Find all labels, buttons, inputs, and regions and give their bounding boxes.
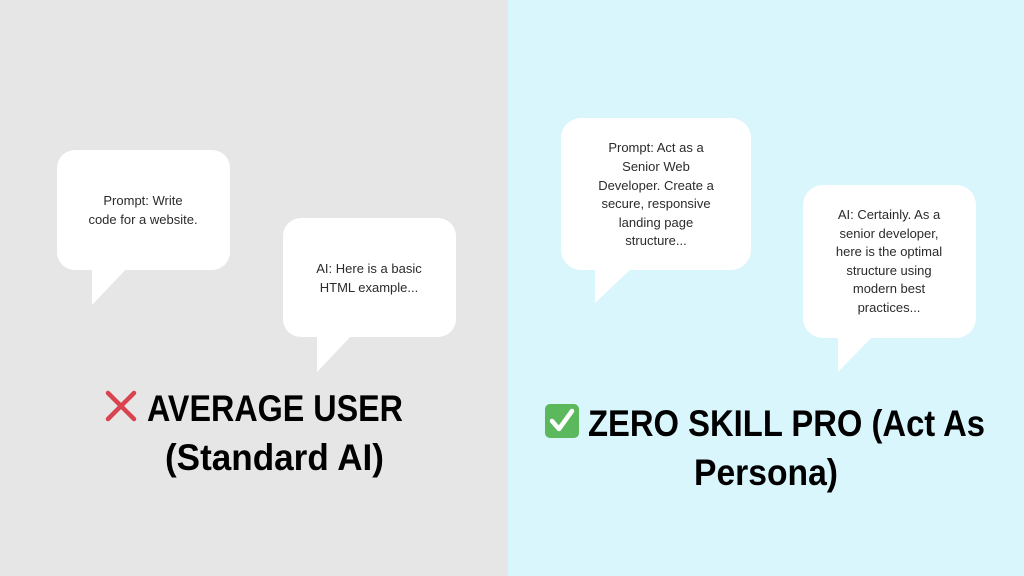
- bubble: expert AI reply: structure using: [846, 263, 932, 278]
- bubble: expert AI reply: [803, 185, 976, 372]
- bubble: basic AI reply: [283, 218, 456, 372]
- bubble: expert AI reply: senior developer,: [839, 226, 939, 241]
- bubble: basic AI reply: AI: Here is a basic: [316, 261, 422, 276]
- bubble: user prompt: Prompt: Write: [103, 193, 183, 208]
- bubble: user prompt: code for a website.: [88, 212, 198, 227]
- bubble: persona prompt: Prompt: Act as a: [608, 140, 704, 155]
- heading: average user: [147, 388, 403, 478]
- heading: zero skill pro: Persona): [694, 452, 838, 493]
- bubble: expert AI reply: AI: Certainly. As a: [838, 207, 941, 222]
- bubble: expert AI reply: practices...: [858, 300, 920, 315]
- bubble: expert AI reply: here is the optimal: [836, 244, 942, 259]
- bubble: persona prompt: [561, 118, 751, 303]
- icon: green check: [545, 404, 579, 438]
- panel: zero skill pro background: [508, 0, 1024, 576]
- bubble: persona prompt: Senior Web: [622, 159, 690, 174]
- bubble: user prompt: [57, 150, 230, 305]
- bubble: persona prompt: landing page: [619, 215, 693, 230]
- bubble: persona prompt: structure...: [625, 233, 687, 248]
- bubble: persona prompt: Developer. Create a: [598, 178, 715, 193]
- bubble: basic AI reply: HTML example...: [320, 280, 418, 295]
- heading: zero skill pro: ZERO SKILL PRO (Act As: [588, 403, 985, 444]
- bubble: expert AI reply: modern best: [853, 281, 926, 296]
- heading: average user: (Standard AI): [165, 437, 384, 478]
- icon: red cross: [108, 393, 134, 419]
- panel: average user background: [0, 0, 508, 576]
- bubble: persona prompt: secure, responsive: [601, 196, 711, 211]
- heading: zero skill pro: [588, 403, 985, 493]
- heading: average user: AVERAGE USER: [147, 388, 403, 429]
